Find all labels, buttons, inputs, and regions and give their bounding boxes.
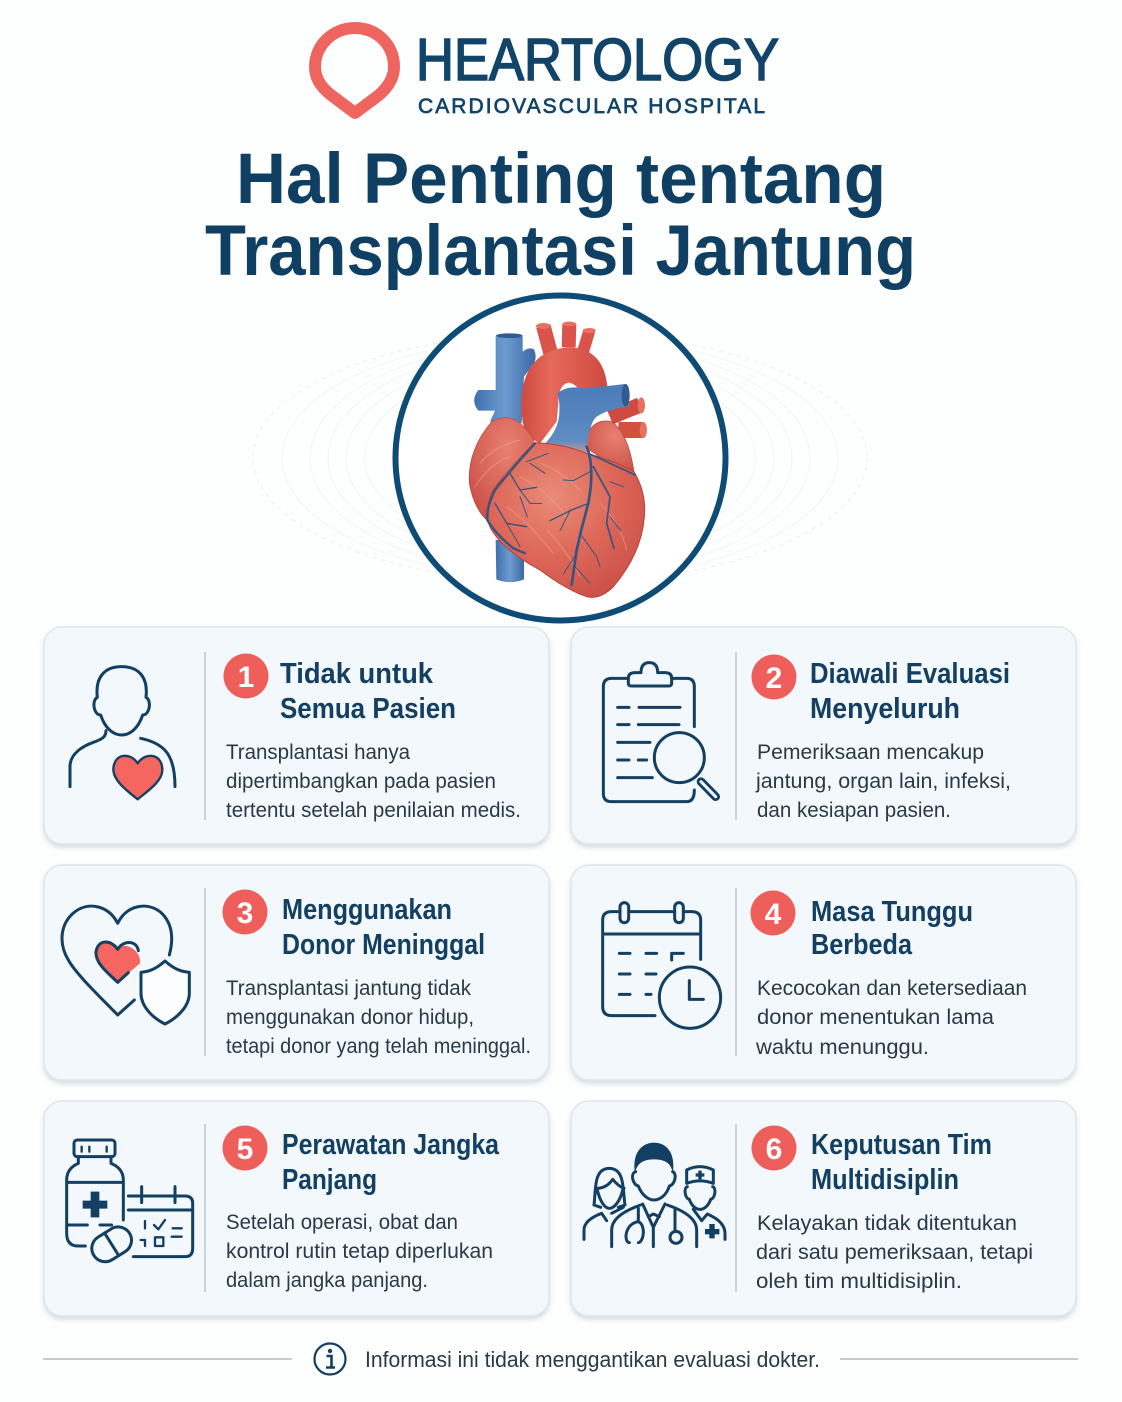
muscle texture xyxy=(475,440,627,577)
body 1: dipertimbangkan pada pasien xyxy=(226,770,496,793)
body 3: Transplantasi jantung tidak xyxy=(226,977,471,1000)
anatomical heart xyxy=(469,322,647,597)
aorta branches xyxy=(543,324,589,353)
heart illustration in circle xyxy=(396,296,726,620)
body 1 xyxy=(226,741,521,822)
body 5: Setelah operasi, obat dan xyxy=(226,1211,458,1234)
badge 5 xyxy=(222,1126,268,1170)
heading 4: Berbeda xyxy=(811,929,913,961)
body 6: oleh tim multidisiplin. xyxy=(756,1270,962,1293)
heading 1 xyxy=(280,658,456,725)
icon: medical team xyxy=(584,1143,725,1247)
coronary vessels xyxy=(487,443,635,585)
badge 4: 4 xyxy=(765,898,782,931)
body 6 xyxy=(756,1212,1033,1293)
vena cava upper xyxy=(474,334,536,423)
body 6: Kelayakan tidak ditentukan xyxy=(757,1212,1017,1235)
heading 4: Masa Tunggu xyxy=(811,896,973,928)
icon: person with heart xyxy=(70,667,175,799)
badge 3: 3 xyxy=(237,897,253,930)
circle frame xyxy=(396,296,726,620)
heading 4 xyxy=(811,896,973,961)
title: Hal Penting tentang xyxy=(236,140,886,219)
icon: medicine bottle, pill and calendar xyxy=(67,1140,193,1267)
panel 4: Masa Tunggu Berbeda xyxy=(571,865,1076,1080)
left atrium xyxy=(587,421,634,472)
badge 1 xyxy=(224,654,268,698)
badge 5: 5 xyxy=(237,1133,253,1166)
panel 1: Tidak untuk Semua Pasien xyxy=(44,627,549,844)
badge 2 xyxy=(752,654,796,700)
badge 2: 2 xyxy=(766,662,782,695)
panel 3: Menggunakan Donor Meninggal xyxy=(44,865,549,1080)
logo: Heartology xyxy=(315,27,779,118)
panel 6: Keputusan Tim Multidisiplin xyxy=(571,1101,1076,1316)
heading 1: Semua Pasien xyxy=(280,693,456,725)
body 5: dalam jangka panjang. xyxy=(226,1269,428,1292)
body 4: donor menentukan lama xyxy=(757,1006,994,1029)
pulmonary red stubs xyxy=(610,405,640,417)
heading 3 xyxy=(282,894,485,961)
heading 2 xyxy=(810,658,1010,725)
body 6: dari satu pemeriksaan, tetapi xyxy=(756,1241,1033,1264)
body 5 xyxy=(226,1211,493,1292)
vena cava lower xyxy=(496,540,524,582)
footer text: Informasi ini tidak menggantikan evaluasi dokter. xyxy=(365,1347,820,1372)
heading 6: Keputusan Tim xyxy=(811,1129,992,1161)
body 2: jantung, organ lain, infeksi, xyxy=(755,770,1011,793)
body 2: dan kesiapan pasien. xyxy=(757,799,951,822)
heading 2: Diawali Evaluasi xyxy=(810,658,1010,690)
pulmonary trunk xyxy=(545,384,629,455)
body 4: Kecocokan dan ketersediaan xyxy=(757,977,1027,1000)
right atrium xyxy=(469,418,534,519)
body 2 xyxy=(755,741,1011,822)
body 5: kontrol rutin tetap diperlukan xyxy=(226,1240,493,1263)
icon: heart with shield xyxy=(62,906,189,1024)
heading 3: Donor Meninggal xyxy=(282,929,485,961)
title: Transplantasi Jantung xyxy=(205,212,916,291)
heading 1: Tidak untuk xyxy=(280,658,434,690)
body 3 xyxy=(226,977,531,1058)
heading 5 xyxy=(282,1129,500,1196)
heading 6: Multidisiplin xyxy=(811,1164,959,1196)
icon: logo pin ring xyxy=(315,28,394,113)
body 3: menggunakan donor hidup, xyxy=(226,1006,474,1029)
heading 5: Panjang xyxy=(282,1164,377,1196)
body 4 xyxy=(755,977,1027,1059)
icon: clipboard with magnifier xyxy=(603,663,716,802)
badge 6: 6 xyxy=(766,1133,782,1166)
heading 2: Menyeluruh xyxy=(810,693,960,725)
panel 2: Diawali Evaluasi Menyeluruh xyxy=(571,627,1076,844)
heading 3: Menggunakan xyxy=(282,894,452,926)
icon: calendar with clock xyxy=(603,903,721,1028)
aortic arch xyxy=(521,347,607,443)
main ventricle xyxy=(487,443,645,597)
heading 5: Perawatan Jangka xyxy=(282,1129,500,1161)
footer note xyxy=(43,1344,1078,1374)
badge 4 xyxy=(750,890,796,936)
title xyxy=(205,140,916,291)
icon: info xyxy=(314,1344,346,1374)
logo subtitle: CARDIOVASCULAR HOSPITAL xyxy=(418,95,765,118)
heading 6 xyxy=(811,1129,992,1196)
body 1: Transplantasi hanya xyxy=(226,741,410,764)
decorative ripple rings xyxy=(253,333,867,583)
panel 5: Perawatan Jangka Panjang xyxy=(44,1101,549,1316)
badge 1: 1 xyxy=(238,661,254,694)
logo wordmark: HEARTOLOGY xyxy=(416,27,779,93)
body 1: tertentu setelah penilaian medis. xyxy=(226,799,521,822)
badge 3 xyxy=(222,890,268,934)
body 2: Pemeriksaan mencakup xyxy=(757,741,984,764)
body 3: tetapi donor yang telah meninggal. xyxy=(226,1035,531,1058)
badge 6 xyxy=(752,1126,796,1170)
body 4: waktu menunggu. xyxy=(755,1036,929,1059)
